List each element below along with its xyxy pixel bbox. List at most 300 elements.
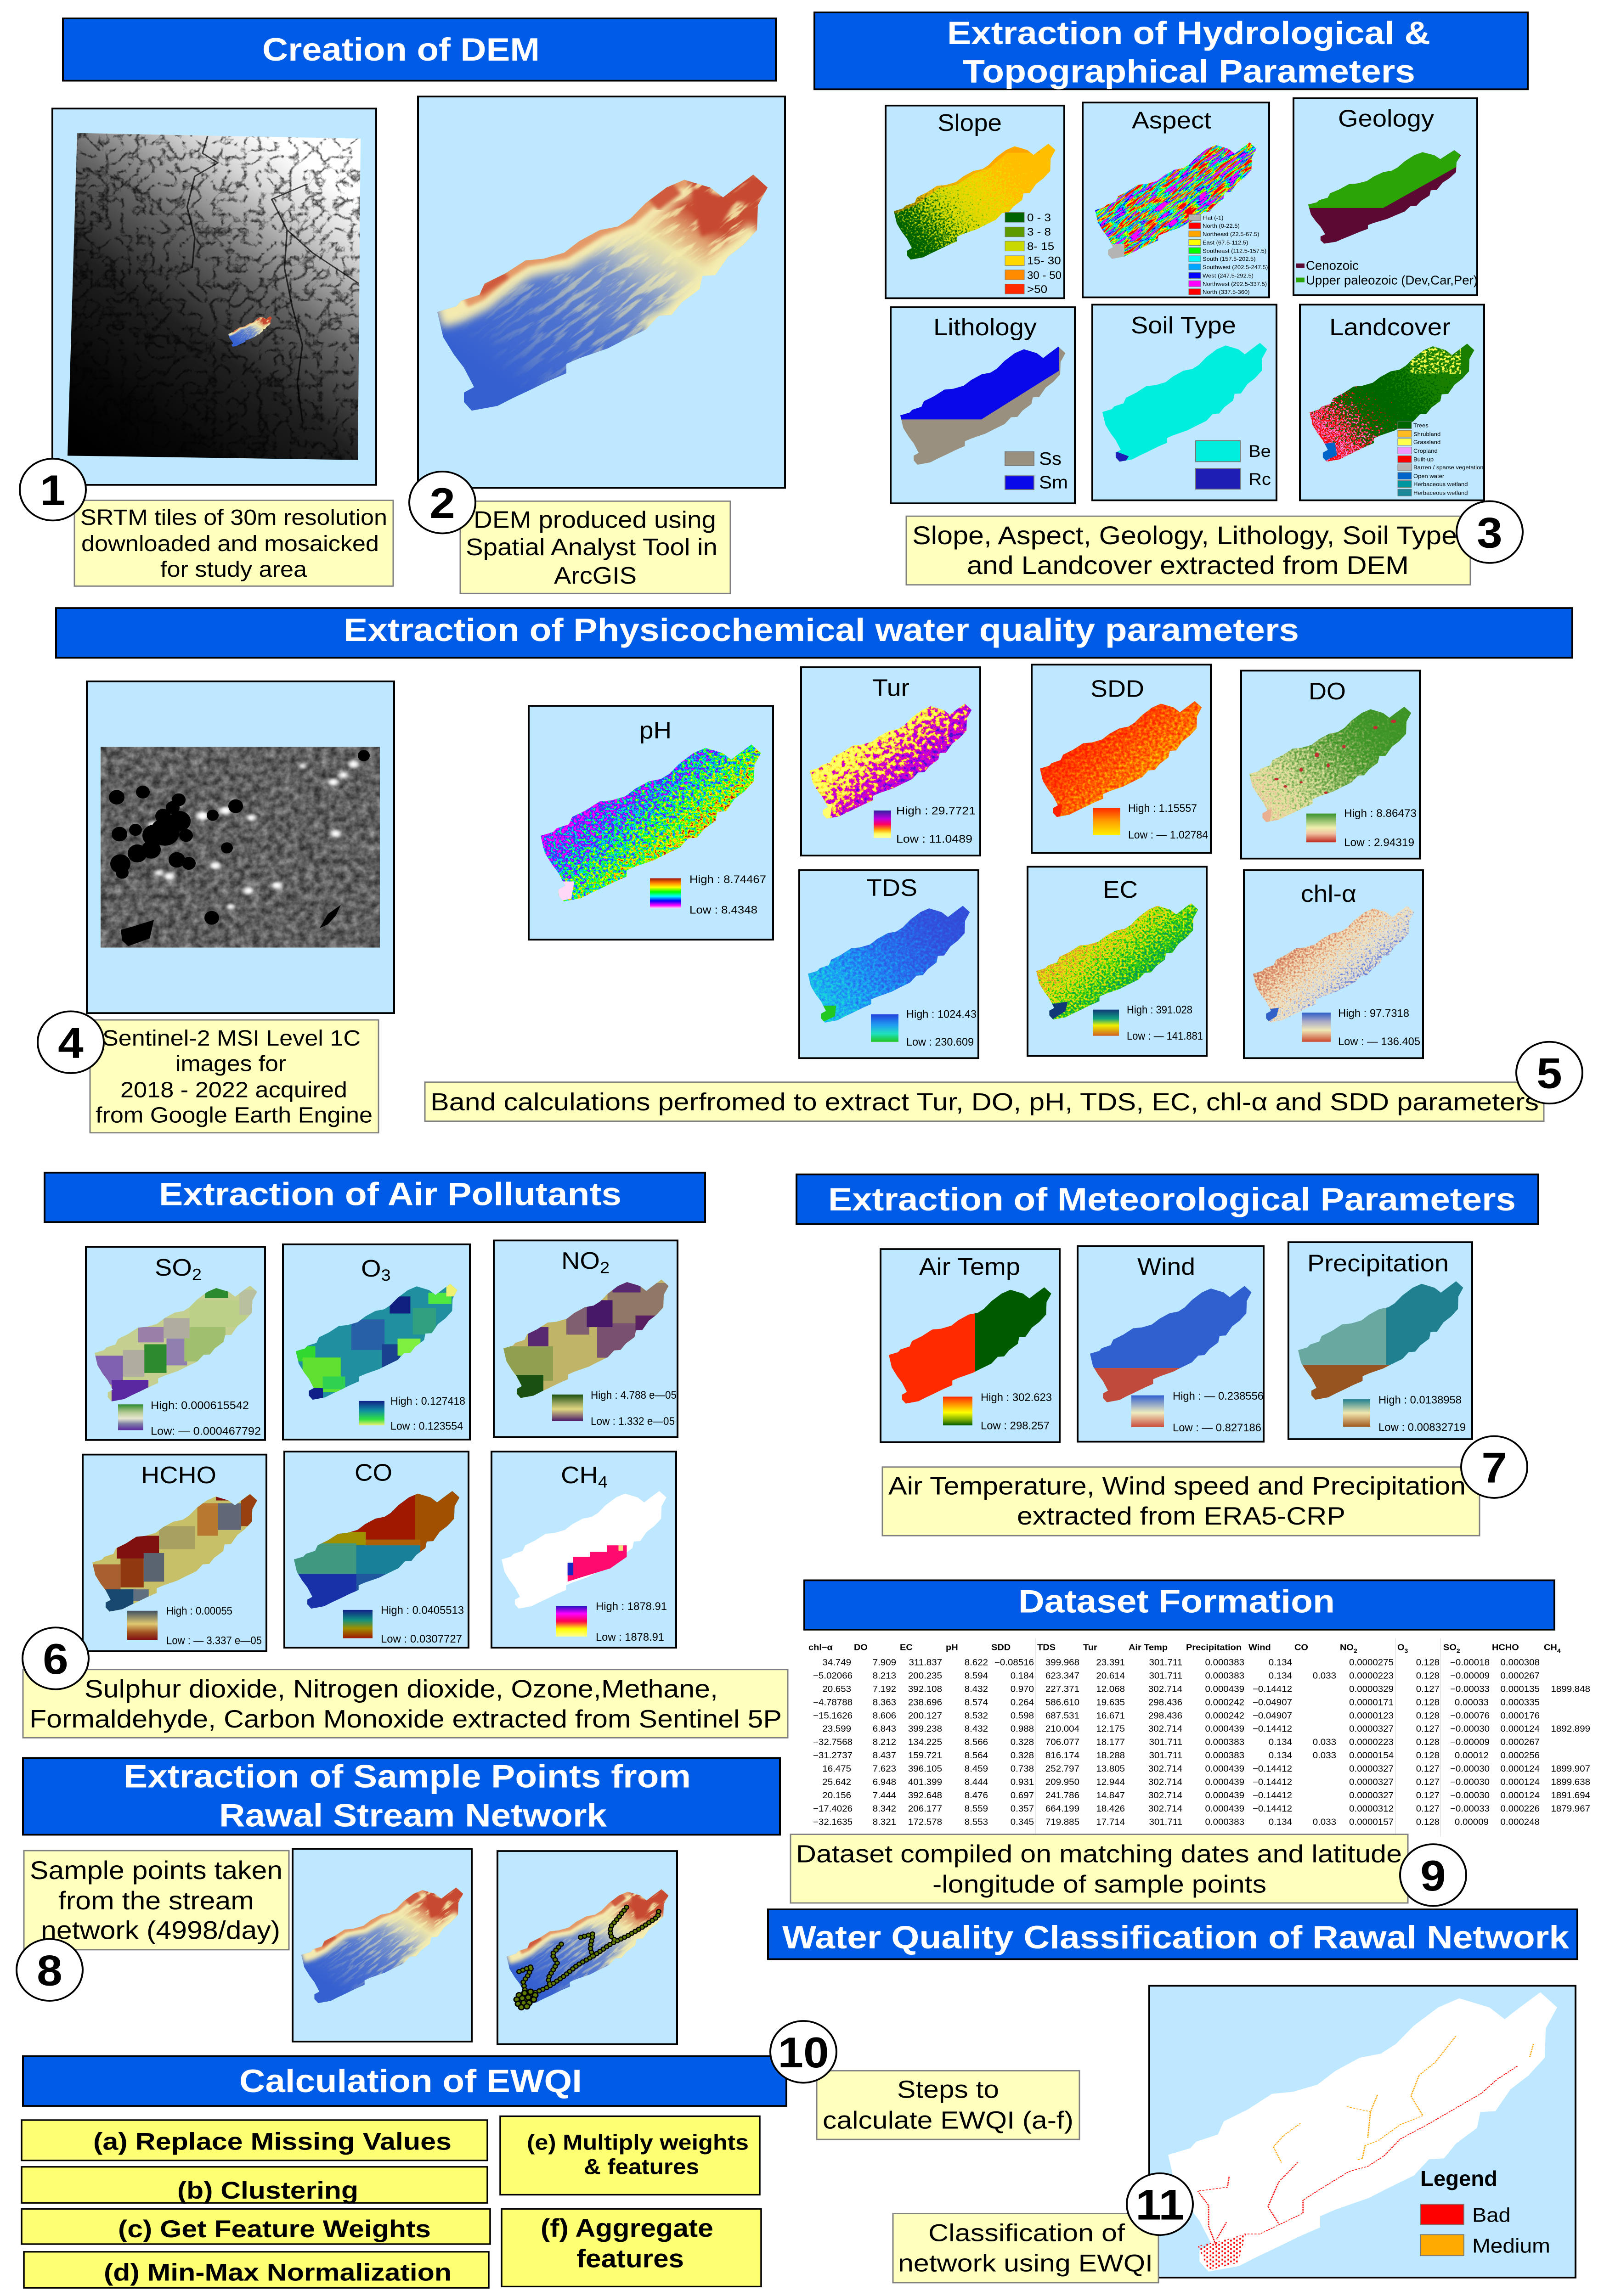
table: compiled dataset: 719.885 [1045, 1818, 1079, 1827]
table: compiled dataset: 0.134 [1269, 1818, 1292, 1827]
heading: Extraction of Air Pollutants: Extraction of Air Pollutants [159, 1176, 621, 1212]
step e: & features [584, 2155, 699, 2179]
map: HCHO [92, 1494, 257, 1612]
map: EC [1036, 903, 1198, 1019]
heading: Dataset Formation [804, 1580, 1554, 1630]
heading: Extraction of Hydrological & Topographical Parameters: Extraction of Hydrological & [947, 15, 1430, 51]
text: step 8 description: Sample points taken [30, 1856, 282, 1885]
table: compiled dataset: −5.02066 [813, 1671, 853, 1681]
badge: 2: 2 [429, 479, 455, 527]
step f: features [576, 2244, 684, 2273]
text: step 5 description: Band calculations perfromed to extract Tur, DO, pH, TDS, EC, chl-α and SDD parameters [430, 1088, 1539, 1116]
heading: TDS: TDS [866, 875, 917, 901]
table: compiled dataset: 2 [1354, 1648, 1357, 1654]
legend: SO2: Low: — 0.000467792 [151, 1425, 261, 1437]
panel: O3 [283, 1244, 470, 1440]
heading: SO2: 2 [192, 1265, 202, 1283]
table: compiled dataset: 200.127 [908, 1711, 942, 1721]
table: compiled dataset: 0.0000327 [1349, 1778, 1394, 1787]
table: compiled dataset: 210.004 [1045, 1724, 1079, 1734]
table: compiled dataset: 18.177 [1096, 1738, 1125, 1747]
heading: O3: O [361, 1255, 381, 1282]
text: step 11 description: Classification of [928, 2219, 1125, 2246]
badge: 5 [1516, 1042, 1582, 1103]
legend: Air Temp [943, 1391, 1052, 1432]
table: compiled dataset: 1899.638 [1551, 1778, 1590, 1787]
table: compiled dataset: DO [854, 1643, 868, 1653]
table: compiled dataset: 1891.694 [1551, 1791, 1590, 1801]
badge: 4 [38, 1011, 104, 1073]
heading: DO: DO [1309, 678, 1346, 705]
table: compiled dataset: −0.14412 [1253, 1778, 1292, 1787]
table: compiled dataset: 0.033 [1313, 1738, 1336, 1747]
heading: Water Quality Classification of Rawal Network [768, 1909, 1577, 1959]
badge: 6 [23, 1627, 89, 1689]
table: compiled dataset: 1892.899 [1551, 1724, 1590, 1734]
heading: Extraction of Meteorological Parameters [796, 1174, 1538, 1224]
map: DO [1249, 707, 1412, 822]
table: compiled dataset: −0.00030 [1450, 1791, 1490, 1801]
section: Hydrological and topographical parameters [814, 12, 1528, 585]
table: compiled dataset: 298.436 [1148, 1711, 1182, 1721]
table: compiled dataset: HCHO [1492, 1643, 1519, 1653]
legend: Aspect: Northeast (22.5-67.5) [1203, 231, 1259, 237]
text: step 10 description [817, 2071, 1079, 2139]
table: compiled dataset: 0.0000329 [1349, 1684, 1394, 1694]
heading: Water Quality Classification of Rawal Network: Water Quality Classification of Rawal Network [782, 1919, 1570, 1956]
table: compiled dataset: 0.357 [1011, 1804, 1034, 1814]
table: compiled dataset: 0.128 [1416, 1751, 1440, 1761]
table: compiled dataset: 0.000242 [1205, 1711, 1244, 1721]
table: compiled dataset: 16.671 [1096, 1711, 1125, 1721]
legend: O3: Low : 0.123554 [390, 1420, 463, 1432]
badge: 9 [1400, 1844, 1466, 1906]
table: compiled dataset: −0.04907 [1253, 1711, 1292, 1721]
legend: Soil Type: Be [1248, 442, 1271, 461]
legend: HCHO: Low : — 3.337 e—05 [166, 1634, 262, 1647]
legend: O3 [359, 1395, 465, 1432]
text: step 1 description: downloaded and mosaicked [81, 530, 379, 556]
legend: DO: Low : 2.94319 [1344, 836, 1414, 849]
legend: O3: High : 0.127418 [390, 1395, 465, 1407]
step e: (e) Multiply weights [527, 2130, 749, 2155]
table: compiled dataset: −0.00030 [1450, 1778, 1490, 1787]
table: compiled dataset: 0.127 [1416, 1804, 1440, 1814]
table: compiled dataset: 209.950 [1045, 1778, 1079, 1787]
table: compiled dataset: 8.606 [873, 1711, 896, 1721]
table: compiled dataset: 0.000335 [1501, 1698, 1540, 1707]
table: compiled dataset: 8.444 [965, 1778, 988, 1787]
panel: sample points on DEM [407, 1781, 768, 2113]
table: compiled dataset: 0.000124 [1501, 1778, 1540, 1787]
badge: 1: 1 [40, 466, 66, 514]
legend: Aspect: South (157.5-202.5) [1203, 256, 1256, 262]
table: compiled dataset: 0.697 [1011, 1791, 1034, 1801]
table: compiled dataset: 302.714 [1148, 1724, 1182, 1734]
table: compiled dataset: 206.177 [908, 1804, 942, 1814]
table: compiled dataset: Air Temp [1129, 1643, 1168, 1653]
table: compiled dataset: −0.00009 [1450, 1671, 1490, 1681]
text: step 3 description [906, 516, 1470, 585]
legend: Lithology: Ss [1039, 448, 1062, 469]
step d: (d) Min-Max Normalization [104, 2258, 452, 2286]
legend: Landcover: Built-up [1413, 456, 1434, 462]
panel: CH4 [491, 1452, 676, 1648]
table: compiled dataset: 12.068 [1096, 1684, 1125, 1694]
text: step 11 description: network using EWQI [898, 2249, 1153, 2277]
table: compiled dataset: 298.436 [1148, 1698, 1182, 1707]
text: step 2 description: Spatial Analyst Tool in [466, 534, 717, 561]
map: DEM with stream sample points [407, 1781, 768, 2113]
table: compiled dataset: 0.0000223 [1349, 1738, 1394, 1747]
legend: NO2: High : 4.788 e—05 [591, 1389, 677, 1401]
legend: Precipitation: High : 0.0138958 [1378, 1394, 1462, 1406]
table: compiled dataset: 0.931 [1011, 1778, 1034, 1787]
table: compiled dataset: 0.0000171 [1349, 1698, 1394, 1707]
table: compiled dataset: 227.371 [1045, 1684, 1079, 1694]
table: compiled dataset: 0.000267 [1501, 1671, 1540, 1681]
heading: Calculation of EWQI [23, 2056, 786, 2106]
table: compiled dataset: −0.14412 [1253, 1764, 1292, 1774]
table: compiled dataset: 0.000383 [1205, 1751, 1244, 1761]
legend: Geology: Cenozoic [1306, 259, 1359, 273]
legend: Landcover [1398, 422, 1483, 496]
table: compiled dataset: 0.000256 [1501, 1751, 1540, 1761]
table: compiled dataset: 34.749 [822, 1658, 851, 1667]
panel: Aspect [1082, 101, 1270, 298]
table: compiled dataset: 301.711 [1149, 1751, 1182, 1761]
legend: Landcover: Cropland [1413, 448, 1438, 454]
section: Creation of DEM [19, 17, 786, 594]
table: compiled dataset: 0.970 [1011, 1684, 1034, 1694]
table: compiled dataset: 23.599 [822, 1724, 851, 1734]
section: Dataset formation [791, 1580, 1590, 1906]
heading: Extraction of Physicochemical water quality parameters [56, 608, 1572, 658]
table: compiled dataset: 0.127 [1416, 1684, 1440, 1694]
table: compiled dataset: 623.347 [1045, 1671, 1079, 1681]
table: compiled dataset: EC [900, 1643, 913, 1653]
heading: Creation of DEM: Creation of DEM [262, 32, 540, 68]
table: compiled dataset: 302.714 [1148, 1804, 1182, 1814]
panel: SRTM mosaic [52, 108, 376, 485]
legend: CO: High : 0.0405513 [381, 1604, 464, 1616]
heading: Air Temp: Air Temp [919, 1254, 1020, 1280]
table: compiled dataset: 0.000308 [1501, 1658, 1540, 1667]
table: compiled dataset: 0.0000312 [1349, 1804, 1394, 1814]
panel: SDD [1032, 664, 1211, 853]
heading: Lithology: Lithology [933, 314, 1037, 340]
table: compiled dataset: −17.4026 [813, 1804, 853, 1814]
text: step 3 description: and Landcover extracted from DEM [967, 551, 1409, 580]
table: compiled dataset: 0.000383 [1205, 1658, 1244, 1667]
badge: 10 [770, 2021, 836, 2083]
table: compiled dataset: 172.578 [908, 1818, 942, 1827]
step d [24, 2252, 489, 2288]
legend: Landcover: Shrubland [1413, 431, 1440, 437]
table: compiled dataset: 0.000124 [1501, 1791, 1540, 1801]
legend: HCHO [127, 1605, 262, 1647]
map: Tur [810, 703, 972, 819]
map: Slope [894, 144, 1056, 259]
table: compiled dataset: 0.738 [1011, 1764, 1034, 1774]
table: compiled dataset: 0.000242 [1205, 1698, 1244, 1707]
map: Aspect [1095, 142, 1257, 259]
table: compiled dataset: 396.105 [908, 1764, 942, 1774]
panel: CO [284, 1452, 469, 1648]
table: compiled dataset: NO [1340, 1643, 1354, 1653]
text: step 1 description: SRTM tiles of 30m resolution [80, 504, 387, 529]
legend: Soil Type: Rc [1248, 470, 1271, 489]
table: compiled dataset: −0.14412 [1253, 1804, 1292, 1814]
table: compiled dataset: −0.00076 [1450, 1711, 1490, 1721]
table: compiled dataset [808, 1638, 1590, 1836]
badge: 11 [1127, 2173, 1193, 2235]
heading: SO2: SO [155, 1255, 192, 1281]
badge: 3: 3 [1477, 508, 1502, 557]
text: step 7 description [882, 1467, 1480, 1536]
text: step 9 description: Dataset compiled on matching dates and latitude [796, 1840, 1402, 1868]
table: compiled dataset: 0.128 [1416, 1738, 1440, 1747]
table: compiled dataset: 664.199 [1045, 1804, 1079, 1814]
map: O3 [296, 1284, 457, 1400]
legend: SO2: High: 0.000615542 [151, 1399, 249, 1412]
panel: Geology [1293, 98, 1478, 295]
legend: Landcover: Herbaceous wetland [1413, 490, 1468, 496]
table: compiled dataset: 0.000439 [1205, 1724, 1244, 1734]
table: compiled dataset: 301.711 [1149, 1658, 1182, 1667]
table: compiled dataset: 0.128 [1416, 1671, 1440, 1681]
badge: 10: 10 [778, 2028, 829, 2077]
table: compiled dataset: 7.909 [873, 1658, 896, 1667]
table: compiled dataset: 0.345 [1011, 1818, 1034, 1827]
table: compiled dataset: 13.805 [1096, 1764, 1125, 1774]
panel: HCHO [83, 1455, 266, 1651]
heading: CH4: CH [561, 1462, 598, 1489]
table: compiled dataset: 0.328 [1011, 1751, 1034, 1761]
table: compiled dataset: Tur [1083, 1643, 1097, 1653]
map: CO [294, 1491, 460, 1609]
legend: Tur: High : 29.7721 [896, 805, 976, 817]
legend: Slope: 8- 15 [1027, 241, 1054, 253]
heading: NO2: 2 [600, 1259, 610, 1277]
text: step 4 description [90, 1020, 378, 1133]
text: step 6 description: Formaldehyde, Carbon Monoxide extracted from Sentinel 5P [29, 1705, 782, 1733]
table: compiled dataset: 8.553 [965, 1818, 988, 1827]
legend: pH: High : 8.74467 [689, 873, 766, 886]
text: step 8 description: from the stream [58, 1886, 254, 1915]
legend: Precipitation: Low : 0.00832719 [1378, 1421, 1466, 1434]
badge: 4: 4 [58, 1019, 84, 1067]
table: compiled dataset: −0.08516 [994, 1658, 1034, 1667]
legend: NO2: Low : 1.332 e—05 [591, 1415, 675, 1428]
map: Geology [1308, 150, 1461, 244]
table: compiled dataset: 0.033 [1313, 1671, 1336, 1681]
map: TDS [808, 906, 970, 1023]
map: SDD [1040, 701, 1202, 817]
table: compiled dataset: 23.391 [1096, 1658, 1125, 1667]
table: compiled dataset: 302.714 [1148, 1684, 1182, 1694]
badge: 3 [1457, 501, 1523, 563]
table: compiled dataset: 0.000383 [1205, 1818, 1244, 1827]
table: compiled dataset: 19.635 [1096, 1698, 1125, 1707]
table: compiled dataset: 8.476 [965, 1791, 988, 1801]
badge: 9: 9 [1420, 1851, 1446, 1900]
table: compiled dataset: 20.156 [822, 1791, 851, 1801]
legend: EC [1093, 1004, 1203, 1042]
legend: chl-α: Low : — 136.405 [1338, 1035, 1420, 1048]
table: compiled dataset: 8.566 [965, 1738, 988, 1747]
heading: Extraction of Physicochemical water quality parameters: Extraction of Physicochemical water quality parameters [344, 612, 1299, 648]
legend: Landcover: Grassland [1413, 439, 1440, 445]
table: compiled dataset: 6.948 [873, 1778, 896, 1787]
table: compiled dataset: 311.837 [909, 1658, 942, 1667]
panel: pH [529, 706, 773, 940]
table: compiled dataset: 0.127 [1416, 1778, 1440, 1787]
panel: Lithology [891, 307, 1075, 503]
table: compiled dataset: 0.000135 [1501, 1684, 1540, 1694]
table: compiled dataset: 0.127 [1416, 1764, 1440, 1774]
table: compiled dataset: 0.000226 [1501, 1804, 1540, 1814]
table: compiled dataset: 1879.967 [1551, 1804, 1590, 1814]
table: compiled dataset: 0.00009 [1455, 1818, 1489, 1827]
section: Water quality classification [768, 1909, 1577, 2283]
legend: Aspect [1189, 214, 1268, 295]
legend: Lithology: Sm [1039, 472, 1068, 492]
panel: Precipitation [1288, 1242, 1472, 1439]
legend: SDD: Low : — 1.02784 [1128, 829, 1208, 841]
section: Air pollutants [23, 1173, 788, 1738]
heading: Wind: Wind [1137, 1254, 1195, 1280]
panel: DEM result [233, 0, 972, 631]
text: step 10 description: calculate EWQI (a-f) [823, 2106, 1073, 2134]
text: step 7 description: extracted from ERA5-CRP [1017, 1502, 1345, 1530]
table: compiled dataset: TDS [1037, 1643, 1056, 1653]
table: compiled dataset: 8.532 [965, 1711, 988, 1721]
legend: Geology: Upper paleozoic (Dev,Car,Per) [1306, 273, 1478, 287]
text: step 9 description: -longitude of sample points [932, 1870, 1266, 1898]
text: step 8 description [24, 1851, 289, 1950]
legend: Aspect: East (67.5-112.5) [1203, 240, 1248, 246]
table: compiled dataset: 0.000439 [1205, 1684, 1244, 1694]
text: step 8 description: network (4998/day) [41, 1916, 280, 1945]
table: compiled dataset: −0.14412 [1253, 1724, 1292, 1734]
map: Air Temp [889, 1287, 1051, 1404]
legend: TDS [871, 1008, 977, 1048]
table: compiled dataset: 0.000124 [1501, 1764, 1540, 1774]
text: step 1 description [74, 501, 393, 586]
table: compiled dataset: 0.033 [1313, 1818, 1336, 1827]
legend: Slope: 30 - 50 [1027, 269, 1062, 281]
table: compiled dataset: 301.711 [1149, 1671, 1182, 1681]
table: compiled dataset: 8.342 [873, 1804, 896, 1814]
table: compiled dataset: 0.00012 [1455, 1751, 1489, 1761]
table: compiled dataset: −15.1626 [813, 1711, 853, 1721]
legend: Tur [874, 805, 976, 845]
table: compiled dataset: 816.174 [1045, 1751, 1079, 1761]
heading: Extraction of Meteorological Parameters: Extraction of Meteorological Parameters [828, 1182, 1516, 1217]
table: compiled dataset: −31.2737 [813, 1751, 853, 1761]
panel: Tur [801, 667, 980, 855]
text: step 4 description: 2018 - 2022 acquired [120, 1077, 347, 1102]
legend: Slope: 3 - 8 [1027, 226, 1051, 238]
table: compiled dataset: 8.213 [873, 1671, 896, 1681]
heading: HCHO: HCHO [141, 1462, 216, 1489]
heading: Dataset Formation: Dataset Formation [1018, 1584, 1335, 1620]
heading: CH4: 4 [598, 1473, 608, 1491]
table: compiled dataset: 0.033 [1313, 1751, 1336, 1761]
legend: EWQI classes: Medium [1472, 2234, 1550, 2257]
section: Calculation of EWQI [22, 2021, 1079, 2288]
table: compiled dataset: 0.988 [1011, 1724, 1034, 1734]
table: compiled dataset: 301.711 [1149, 1738, 1182, 1747]
text: step 4 description: images for [175, 1051, 286, 1076]
heading: CO: CO [355, 1459, 392, 1486]
text: step 2 description: ArcGIS [554, 562, 637, 589]
table: compiled dataset: 0.134 [1269, 1738, 1292, 1747]
legend: CO: Low : 0.0307727 [381, 1633, 462, 1645]
table: compiled dataset: 3 [1405, 1648, 1408, 1654]
heading: Extraction of Hydrological & Topographical Parameters: Topographical Parameters [963, 54, 1415, 90]
heading: Landcover: Landcover [1329, 314, 1451, 340]
text: step 7 description: Air Temperature, Wind speed and Precipitation [888, 1472, 1466, 1500]
legend: Slope: 15- 30 [1027, 254, 1061, 267]
badge: 2 [409, 472, 475, 533]
table: compiled dataset: 8.212 [873, 1738, 896, 1747]
table: compiled dataset: 8.432 [965, 1724, 988, 1734]
step f: (f) Aggregate [541, 2214, 713, 2243]
table: compiled dataset: 0.000439 [1205, 1778, 1244, 1787]
text: step 6 description [23, 1670, 788, 1738]
table: compiled dataset: 14.847 [1096, 1791, 1125, 1801]
table: compiled dataset: 0.0000327 [1349, 1791, 1394, 1801]
table: compiled dataset: −0.14412 [1253, 1791, 1292, 1801]
legend: Landcover: Herbaceous wetland [1413, 481, 1468, 488]
table: compiled dataset: 399.968 [1045, 1658, 1079, 1667]
table: compiled dataset: 0.127 [1416, 1724, 1440, 1734]
table: compiled dataset: 1899.848 [1551, 1684, 1590, 1694]
heading: Geology: Geology [1338, 105, 1434, 132]
table: compiled dataset: 0.134 [1269, 1751, 1292, 1761]
legend: Aspect: North (0-22.5) [1203, 223, 1240, 229]
badge: 11: 11 [1135, 2181, 1184, 2229]
badge: 7: 7 [1481, 1443, 1507, 1492]
table: compiled dataset: 7.444 [873, 1791, 896, 1801]
map: DEM of basin [233, 0, 972, 631]
table: compiled dataset: SDD [991, 1643, 1011, 1653]
heading: O3: 3 [381, 1266, 391, 1284]
table: compiled dataset: 7.192 [873, 1684, 896, 1694]
map: SRTM grayscale elevation [64, 129, 367, 463]
heading: Extraction of Sample Points from Rawal Stream Network [23, 1758, 780, 1835]
table: compiled dataset: 0.328 [1011, 1738, 1034, 1747]
panel: TDS [799, 870, 978, 1058]
table: compiled dataset: 0.0000327 [1349, 1724, 1394, 1734]
table: compiled dataset: 0.0000123 [1349, 1711, 1394, 1721]
table: compiled dataset: 8.564 [965, 1751, 988, 1761]
table: compiled dataset: 8.594 [965, 1671, 988, 1681]
table: compiled dataset: 8.622 [965, 1658, 988, 1667]
table: compiled dataset: 687.531 [1045, 1711, 1079, 1721]
legend: Wind: Low : — 0.827186 [1173, 1422, 1261, 1434]
table: compiled dataset: 301.711 [1149, 1818, 1182, 1827]
section: Sample points [17, 1758, 780, 2113]
legend: pH: Low : 8.4348 [689, 904, 757, 916]
legend: Slope: 0 - 3 [1027, 212, 1051, 224]
map: Precipitation [1298, 1281, 1463, 1400]
table: compiled dataset: 0.000439 [1205, 1791, 1244, 1801]
table: compiled dataset: 8.363 [873, 1698, 896, 1707]
table: compiled dataset: 8.574 [965, 1698, 988, 1707]
